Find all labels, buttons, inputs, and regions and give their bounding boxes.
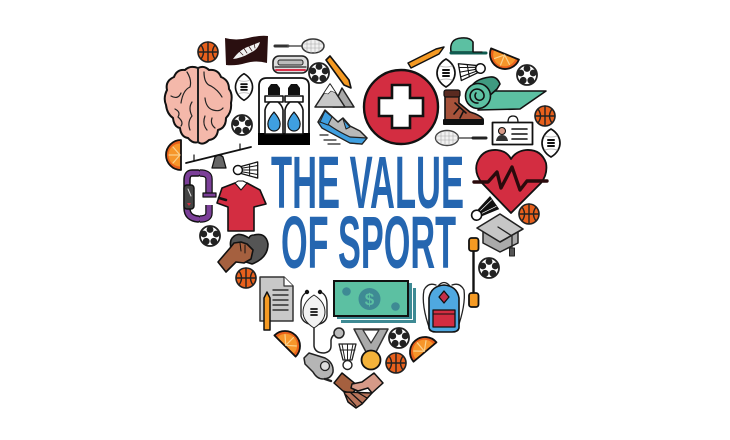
icon: backpack (423, 282, 464, 332)
icon: rowing oar (469, 238, 478, 307)
icon: rugby ball (235, 74, 253, 100)
icon: banknotes (334, 281, 416, 323)
icon: orange slice (485, 48, 519, 74)
icon: red shirt (217, 181, 266, 231)
icon: basketball (519, 204, 539, 224)
icon: rugby ball (437, 59, 455, 87)
icon: shuttlecock (458, 59, 487, 81)
icon: running shoe (318, 110, 367, 144)
icon: medical cross (364, 70, 438, 144)
icon: handshake (334, 373, 383, 408)
icon: basketball (535, 106, 555, 126)
icon: shuttlecock (339, 344, 356, 370)
icon: mountains (315, 84, 354, 107)
icon: basketball (236, 268, 256, 288)
icon: ID card (492, 116, 532, 144)
icon: glasses case (273, 56, 308, 73)
icon: whistle (304, 353, 333, 381)
icon: seesaw (186, 144, 251, 168)
icon: flag with fern (225, 36, 268, 65)
icon: orange slice (274, 325, 306, 357)
icon: orange slice (166, 140, 181, 170)
icon: hiking boot (443, 90, 484, 125)
icon: yoga mat (466, 77, 546, 110)
icon: brain (165, 67, 232, 144)
icon: banknotes: $ (365, 290, 375, 309)
icon: badminton racket (275, 39, 324, 53)
icon: medal (354, 329, 388, 370)
icon: basketball (198, 42, 218, 62)
title (271, 141, 464, 284)
icon: badminton racket (436, 130, 486, 146)
icon: document with pencil (260, 277, 293, 330)
icon: water bottles (258, 78, 310, 145)
icon: soccer ball (232, 115, 252, 135)
icon: fitness band (184, 173, 216, 219)
icon: shuttlecock (468, 196, 499, 225)
icon: soccer ball (479, 258, 499, 278)
icon: pencil (408, 47, 444, 68)
icon: cap (451, 38, 486, 53)
icon: basketball (386, 353, 406, 373)
icon: red heart with pulse (474, 150, 547, 213)
heart of sports icons: THE VALUE (271, 141, 464, 224)
icon: shuttlecock (233, 162, 258, 178)
icon: heart in hand (218, 234, 268, 272)
icon: soccer ball (517, 65, 537, 85)
icon: soccer ball (309, 63, 329, 83)
icon: graduation cap (477, 214, 523, 256)
icon: soccer ball (200, 226, 220, 246)
icon: stethoscope with rugby ball (301, 290, 344, 353)
icon: pencil (326, 56, 351, 88)
icon: orange slice (404, 331, 436, 362)
icon: rugby ball (542, 129, 560, 157)
icon: soccer ball (389, 328, 409, 348)
heart of sports icons: OF SPORT (281, 201, 456, 284)
